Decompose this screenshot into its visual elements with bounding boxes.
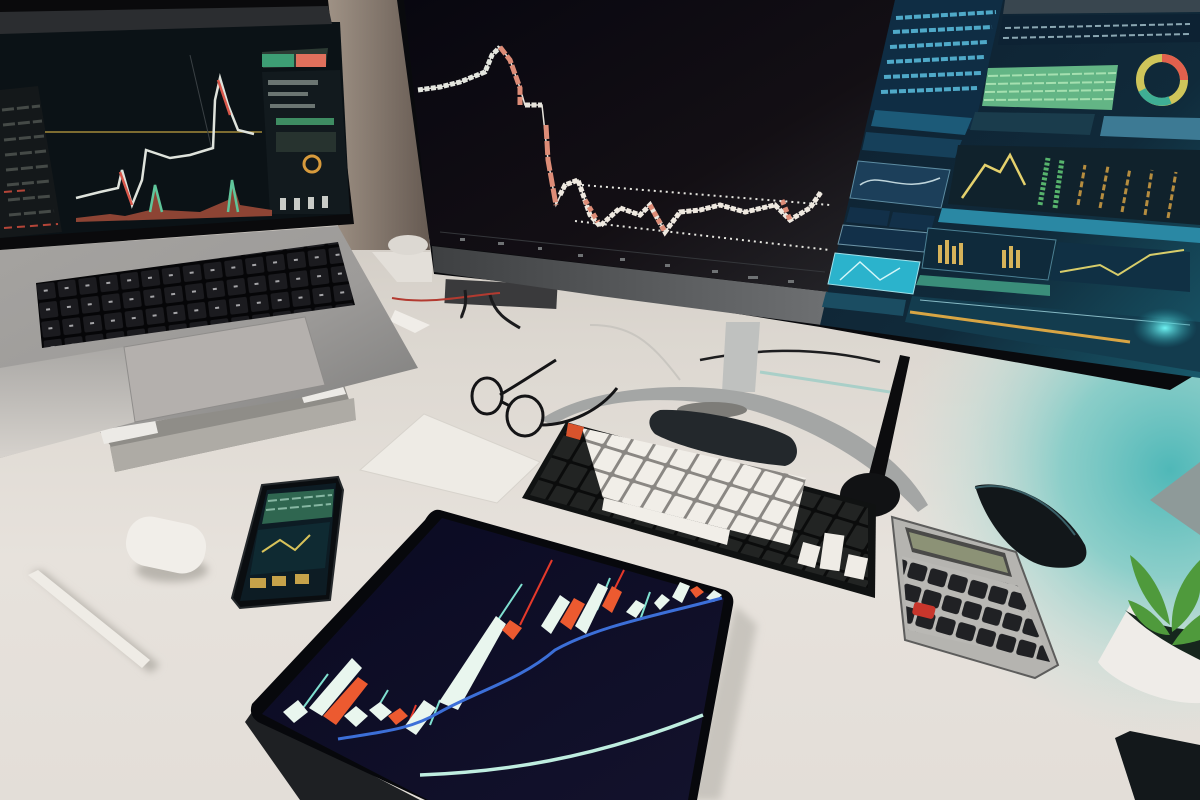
laptop base xyxy=(0,226,418,458)
laptop price chart xyxy=(45,55,272,222)
airpods case xyxy=(122,512,210,582)
black object bottom-right corner xyxy=(1115,731,1200,800)
tablet body xyxy=(251,510,733,800)
monitor xyxy=(397,0,1200,512)
monitor right dashboard xyxy=(820,0,1200,378)
white desk pad xyxy=(360,414,540,503)
falling candles xyxy=(323,586,704,725)
monitor bezel xyxy=(397,0,1200,390)
cables and desk clutter behind the monitor xyxy=(372,235,890,392)
glasses case xyxy=(649,402,797,466)
laptop keyboard xyxy=(36,242,355,348)
mechanical keyboard xyxy=(522,422,876,598)
blue trend line xyxy=(338,598,722,739)
grey object at right edge xyxy=(1150,462,1200,535)
laptop screen xyxy=(0,6,350,238)
back wall xyxy=(320,0,430,250)
candlestick chart xyxy=(418,47,830,272)
bar and line panels xyxy=(922,228,1056,280)
time axis labels xyxy=(460,238,794,283)
rising candles xyxy=(283,582,722,735)
monitor left chart screen xyxy=(404,0,895,292)
stylus pencil xyxy=(28,570,160,673)
monitor stand arc xyxy=(540,387,928,512)
tablet screen xyxy=(262,518,724,800)
laptop stand xyxy=(100,384,356,472)
calculator xyxy=(892,517,1058,678)
laptop trackpad xyxy=(124,317,325,422)
top header strip xyxy=(1003,0,1200,14)
bottom timeline xyxy=(916,275,1050,296)
laptop xyxy=(0,0,418,472)
laptop screen bezel xyxy=(0,0,354,250)
monitor neck xyxy=(722,322,760,392)
plant in white pot xyxy=(1098,555,1200,703)
monitor chin reflection xyxy=(432,246,830,325)
black pen stand arm xyxy=(840,355,910,517)
dashboard chart panels xyxy=(948,145,1200,225)
tablet candlestick chart xyxy=(283,560,722,775)
wireless mouse xyxy=(975,484,1086,568)
white trend line xyxy=(420,715,703,775)
tablet xyxy=(245,510,757,800)
tablet folio cover xyxy=(245,712,420,800)
green data panel xyxy=(982,65,1118,110)
donut gauge xyxy=(1140,58,1184,102)
spectacles xyxy=(472,360,617,436)
tablet shadow xyxy=(690,605,757,800)
smartphone xyxy=(232,477,343,608)
